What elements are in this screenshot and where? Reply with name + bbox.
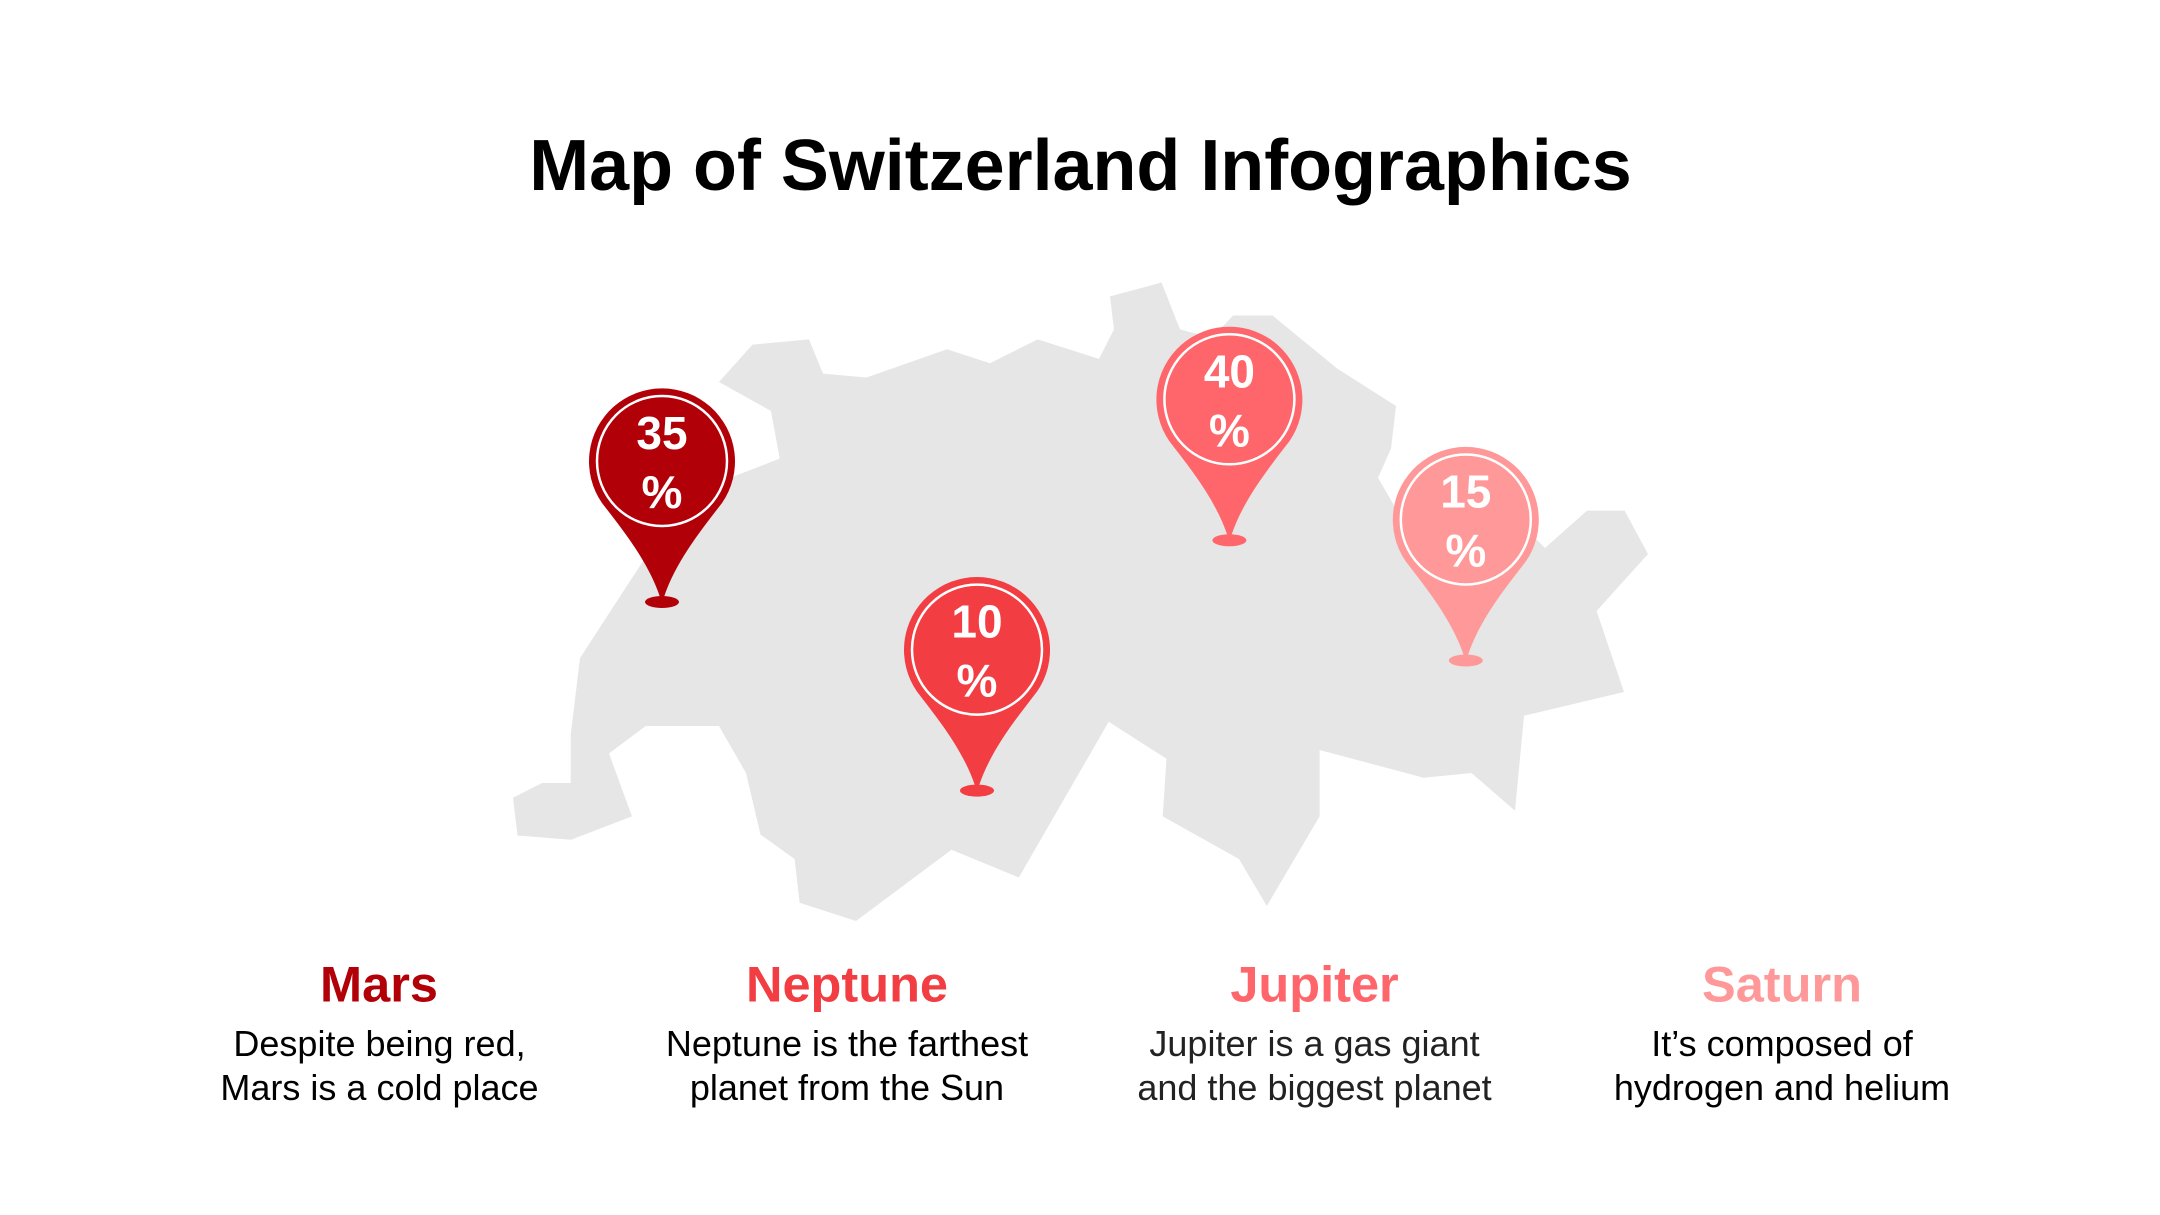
title: Map of Switzerland Infographics — [529, 126, 1632, 206]
text block: Saturn: hydrogen and helium — [1614, 1067, 1950, 1108]
text block: Neptune: planet from the Sun — [690, 1067, 1004, 1108]
text block: Neptune — [666, 956, 1028, 1108]
text block: Jupiter — [1137, 956, 1492, 1108]
text block: Jupiter: and the biggest planet — [1137, 1067, 1492, 1108]
text block: Mars — [220, 956, 539, 1108]
pin: Neptune 10%: % — [957, 655, 997, 707]
text block: Jupiter: Jupiter is a gas giant — [1149, 1023, 1480, 1064]
pin: Saturn 15%: % — [1445, 524, 1486, 576]
pin: Jupiter 40%: % — [1209, 404, 1250, 456]
map of Switzerland — [513, 282, 1648, 921]
text block: Jupiter: Jupiter — [1230, 956, 1399, 1012]
text block: Mars: Mars — [320, 956, 438, 1012]
pin: Mars 35%: % — [642, 466, 682, 518]
text block: Mars: Despite being red, — [233, 1023, 526, 1064]
text block: Saturn: Saturn — [1702, 956, 1862, 1012]
pin: Saturn 15%: 15 — [1440, 466, 1491, 518]
text block: Saturn — [1614, 956, 1950, 1108]
pin: Mars 35%: 35 — [636, 407, 688, 459]
pin: Saturn 15% — [1393, 447, 1539, 666]
text block: Neptune: Neptune is the farthest — [666, 1023, 1028, 1064]
text block: Mars: Mars is a cold place — [220, 1067, 539, 1108]
pin: Neptune 10% — [904, 577, 1050, 797]
pin: Mars 35% — [589, 388, 735, 608]
text block: Saturn: It’s composed of — [1651, 1023, 1914, 1064]
pin: Jupiter 40% — [1156, 327, 1302, 546]
pin: Jupiter 40%: 40 — [1204, 345, 1255, 397]
pin: Neptune 10%: 10 — [951, 596, 1003, 648]
text block: Neptune: Neptune — [746, 956, 948, 1012]
